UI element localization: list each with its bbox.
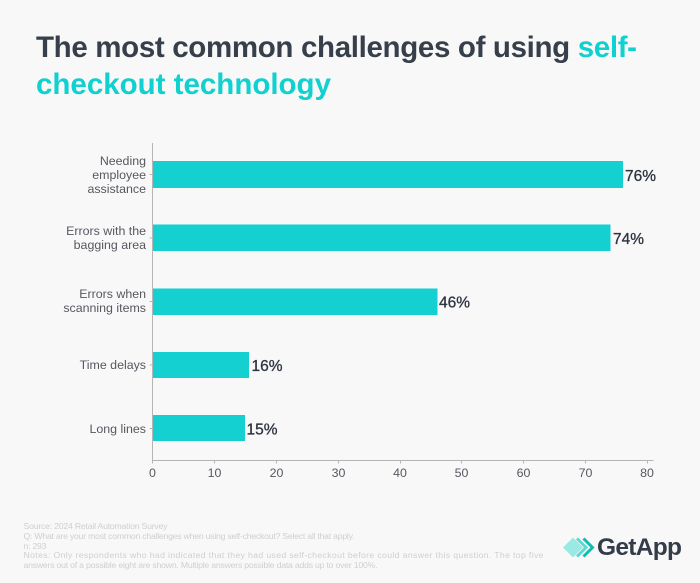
x axis labels	[149, 466, 654, 480]
source notes: Q: What are your most common challenges when using self-checkout? Select all that apply.	[24, 531, 354, 541]
bar chart	[63, 143, 656, 480]
GetApp logo	[563, 534, 682, 561]
x axis labels: 10	[208, 466, 221, 480]
bar: Needing employee assistance 76%: Needing	[100, 154, 146, 168]
bar: Time delays 16%	[80, 352, 283, 378]
bar: Long lines 15%: 15%	[246, 422, 278, 438]
logo wordmark: GetApp	[597, 534, 682, 561]
title: checkout technology	[36, 68, 332, 101]
bar: Needing employee assistance 76%	[87, 154, 656, 196]
x axis	[152, 460, 654, 464]
bar: Needing employee assistance 76%: assistance	[87, 182, 146, 196]
x axis labels: 70	[579, 466, 592, 480]
x axis labels: 50	[455, 466, 468, 480]
source notes: Notes: Only respondents who had indicated that they had used self-checkout before could answer this question. The top five	[24, 550, 544, 560]
x axis labels: 20	[270, 466, 283, 480]
title: The most common challenges of using self-	[36, 31, 637, 64]
bar: Long lines 15%	[90, 415, 278, 441]
x axis labels: 30	[332, 466, 345, 480]
bar: Errors when scanning items 46%	[63, 287, 470, 315]
bar: Errors when scanning items 46%: Errors when	[79, 287, 146, 301]
bar: Errors with the bagging area 74%: 74%	[613, 231, 644, 248]
icon: GetApp diamonds	[563, 538, 592, 558]
x axis labels: 40	[393, 466, 407, 480]
source notes: Source: 2024 Retail Automation Survey	[24, 521, 168, 531]
bar: Time delays 16%: Time delays	[80, 358, 146, 372]
source notes	[24, 521, 544, 570]
x axis labels: 60	[517, 466, 530, 480]
bar: Errors with the bagging area 74%: bagging area	[74, 238, 146, 252]
x axis labels: 0	[149, 466, 156, 480]
y axis	[150, 143, 152, 460]
source notes: n: 293	[24, 541, 47, 551]
bar: Needing employee assistance 76%: employee	[92, 168, 146, 182]
bar: Needing employee assistance 76%: 76%	[625, 168, 656, 185]
source notes: answers out of a possible eight are shown. Multiple answers possible data adds up to over 100%.	[24, 560, 377, 570]
bar: Time delays 16%: 16%	[252, 358, 283, 375]
bar: Errors when scanning items 46%: scanning items	[63, 301, 146, 315]
bar: Long lines 15%: Long lines	[90, 422, 146, 436]
bar: Errors when scanning items 46%: 46%	[439, 294, 470, 312]
x axis labels: 80	[640, 466, 654, 480]
bar: Errors with the bagging area 74%: Errors with the	[66, 224, 146, 238]
title	[36, 31, 637, 101]
bar: Errors with the bagging area 74%	[66, 224, 644, 252]
